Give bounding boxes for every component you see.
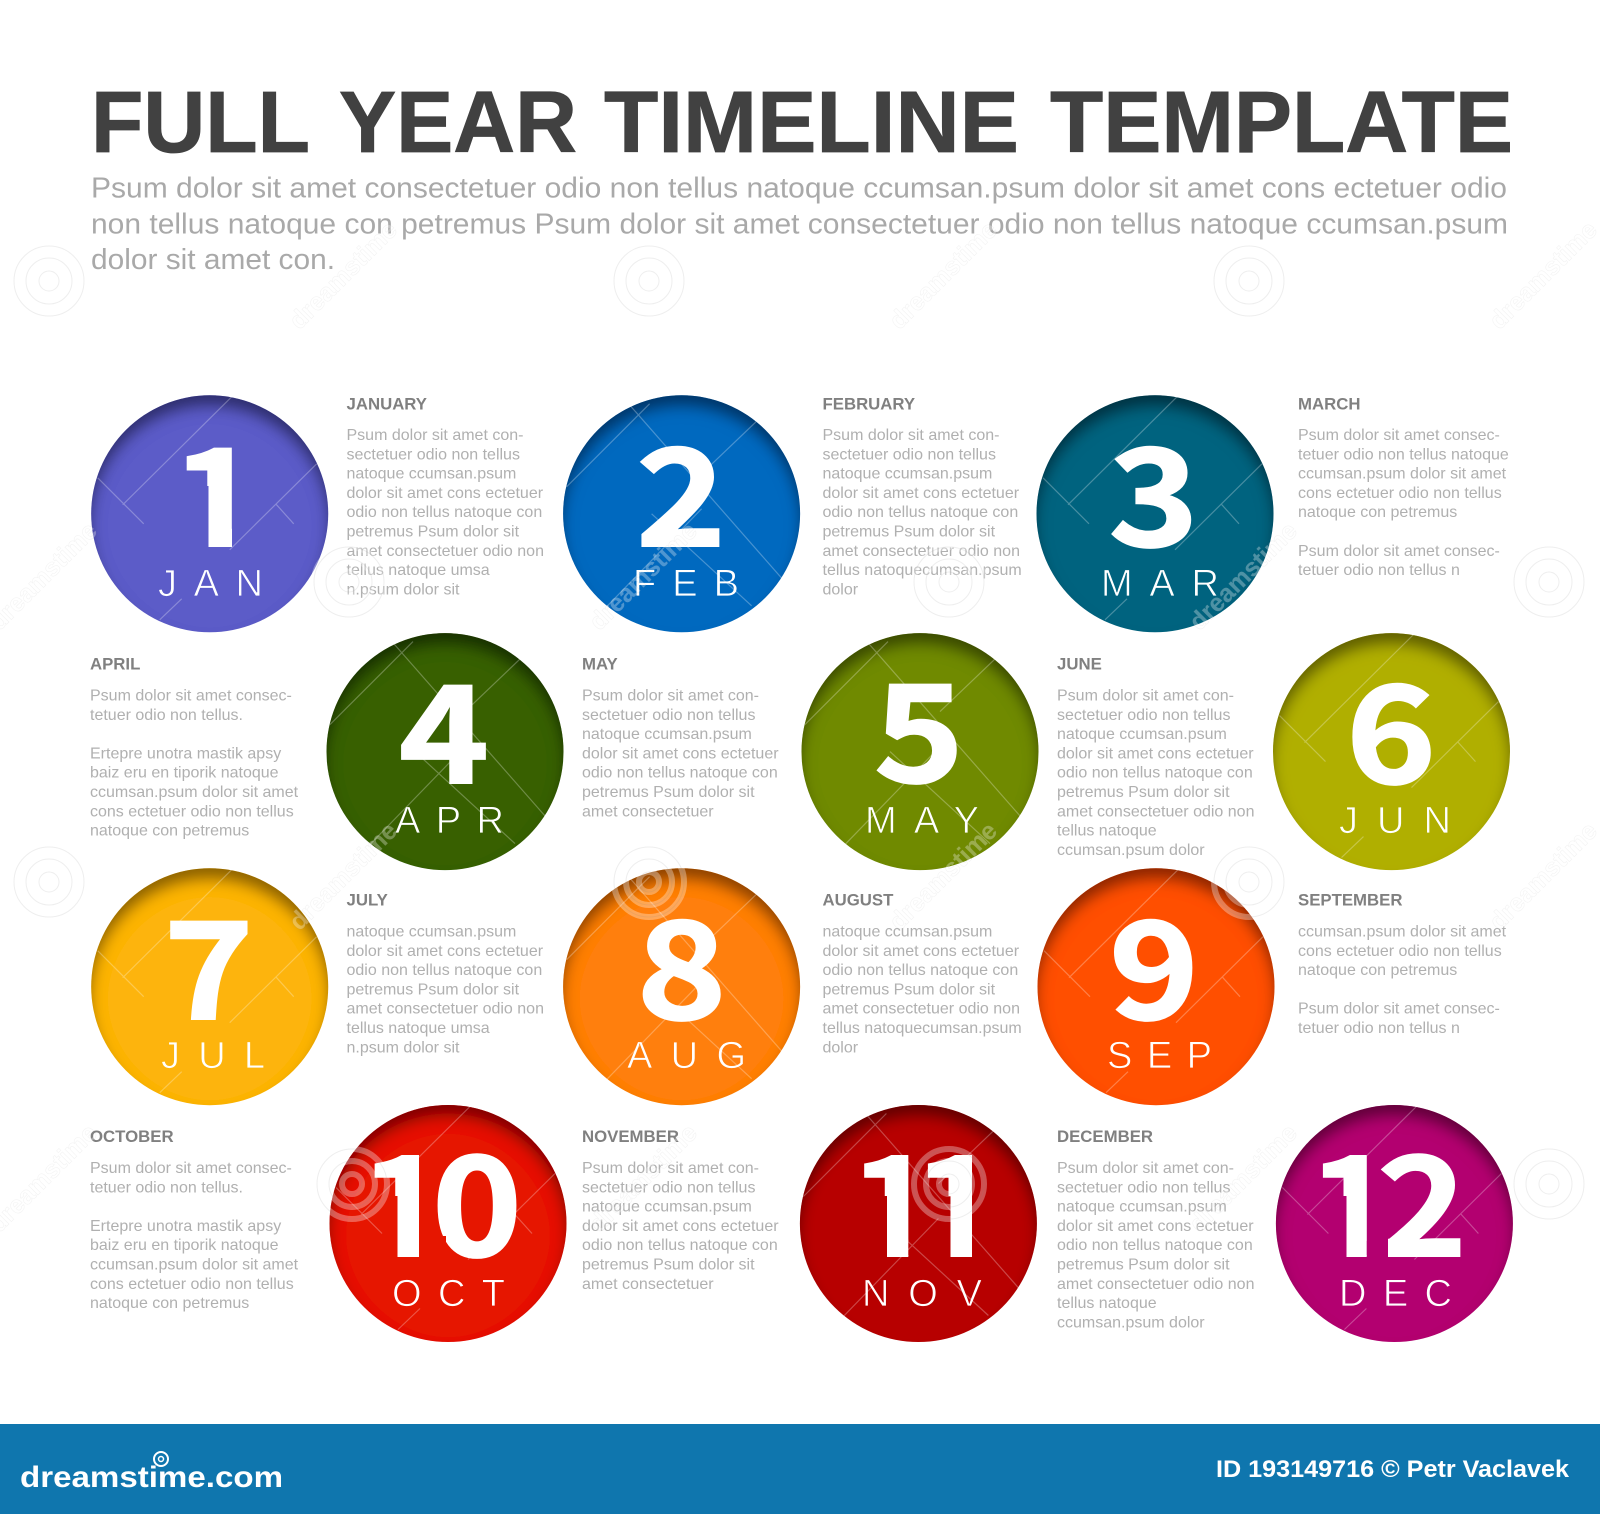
text: November: petremus Psum dolor sit (582, 1256, 755, 1274)
text: August: dolor (822, 1039, 859, 1056)
text: December: Psum dolor sit amet con- (1057, 1160, 1234, 1177)
panel: December circle: 12 (1308, 1100, 1467, 1295)
text: January: natoque ccumsan.psum (346, 466, 516, 483)
panel: November circle: NOV (862, 1273, 983, 1315)
panel: March circle (1036, 390, 1274, 632)
panel: April circle: APR (395, 800, 504, 842)
text: April (90, 654, 299, 840)
watermark: diagonal text: dreamstime (584, 1119, 703, 1238)
panel: December circle: DEC (1339, 1273, 1452, 1315)
text: July: amet consectetuer odio non (346, 1001, 544, 1018)
panel: April circle (326, 627, 564, 870)
text: December: DECEMBER (1057, 1127, 1153, 1146)
text: June: amet consectetuer odio non (1057, 803, 1254, 820)
text: November: sectetuer odio non tellus (582, 1179, 755, 1196)
panel: July circle: JUL (161, 1035, 265, 1077)
text: September: natoque con petremus (1298, 962, 1457, 979)
text: January: Psum dolor sit amet con- (346, 427, 523, 444)
text: December: natoque ccumsan.psum (1057, 1199, 1227, 1216)
text: June: odio non tellus natoque con (1057, 765, 1253, 782)
text: September: Psum dolor sit amet consec- (1298, 1001, 1500, 1018)
text: June (1057, 654, 1254, 859)
text: October: ccumsan.psum dolor sit amet (90, 1256, 299, 1274)
text: November: amet consectetuer (582, 1276, 714, 1293)
panel: September circle: 9 (1109, 863, 1199, 1058)
text: December: ccumsan.psum dolor (1057, 1314, 1205, 1331)
text: May: natoque ccumsan.psum (582, 726, 752, 743)
text: April: Psum dolor sit amet consec- (90, 688, 292, 704)
subtitle text block: Psum dolor sit amet consectetuer odio non tellus natoque ccumsan.psum dolor sit amet cons ectetuer odio (91, 172, 1507, 204)
text: August (822, 890, 1022, 1056)
text: July: dolor sit amet cons ectetuer (346, 943, 544, 960)
text: May: petremus Psum dolor sit (582, 784, 755, 801)
text: September: SEPTEMBER (1298, 890, 1402, 910)
text: May: odio non tellus natoque con (582, 765, 778, 782)
text: November: dolor sit amet cons ectetuer (582, 1218, 779, 1235)
text: January: n.psum dolor sit (346, 581, 460, 598)
panel: August circle: 8 (637, 863, 727, 1058)
text: June: dolor sit amet cons ectetuer (1057, 745, 1254, 762)
watermark: diagonal text: dreamstime (884, 216, 1003, 335)
title: TIMELINE (604, 74, 1019, 171)
text: June: JUNE (1057, 654, 1102, 674)
text: September (1298, 890, 1507, 1037)
panel: November circle: 11 (849, 1100, 1003, 1295)
title: YEAR (339, 74, 577, 171)
text: July: odio non tellus natoque con (346, 962, 542, 979)
text: February: FEBRUARY (822, 395, 915, 414)
text: April: cons ectetuer odio non tellus (90, 803, 294, 820)
text: October (90, 1127, 299, 1312)
text: December: tellus natoque (1057, 1295, 1157, 1312)
text: December: odio non tellus natoque con (1057, 1237, 1253, 1254)
text: March: cons ectetuer odio non tellus (1298, 485, 1502, 502)
text: February: tellus natoquecumsan.psum (822, 562, 1022, 579)
text: January: sectetuer odio non tellus (346, 446, 520, 463)
panel: January circle: 1 (171, 390, 262, 585)
text: May: Psum dolor sit amet con- (582, 688, 759, 704)
watermark: diagonal text: dreamstime (284, 817, 403, 936)
text: June: tellus natoque (1057, 823, 1157, 840)
text: October: Ertepre unotra mastik apsy (90, 1218, 281, 1235)
title: FULL (91, 74, 310, 171)
text: December: petremus Psum dolor sit (1057, 1256, 1230, 1274)
text: January: JANUARY (346, 395, 427, 414)
text: June: petremus Psum dolor sit (1057, 784, 1230, 801)
text: October: tetuer odio non tellus. (90, 1179, 243, 1196)
text: April: ccumsan.psum dolor sit amet (90, 784, 299, 801)
panel: January circle: JAN (158, 563, 263, 605)
text: August: dolor sit amet cons ectetuer (822, 943, 1020, 960)
text: July: petremus Psum dolor sit (346, 981, 520, 998)
watermark: spiral outlines on white (14, 246, 1584, 1219)
panel: July circle (91, 863, 328, 1105)
text: July (346, 890, 544, 1056)
text: February: sectetuer odio non tellus (822, 446, 996, 463)
text: June: natoque ccumsan.psum (1057, 726, 1227, 743)
panel: May circle (802, 626, 1038, 870)
text: January: odio non tellus natoque con (346, 504, 542, 521)
watermark: diagonal text: dreamstime (1184, 1119, 1303, 1238)
panel: November circle (800, 1100, 1037, 1342)
text: December: sectetuer odio non tellus (1057, 1179, 1230, 1196)
text: June: Psum dolor sit amet con- (1057, 688, 1234, 704)
subtitle text block: dolor sit amet con. (91, 244, 335, 276)
panel: September circle: SEP (1107, 1035, 1212, 1077)
watermark: diagonal text: dreamstime (1184, 517, 1303, 636)
text: February: amet consectetuer odio non (822, 543, 1020, 560)
panel: May circle: MAY (865, 800, 979, 842)
text: June: sectetuer odio non tellus (1057, 707, 1230, 724)
text: December: dolor sit amet cons ectetuer (1057, 1218, 1254, 1235)
text: May: amet consectetuer (582, 803, 714, 820)
text: April: tetuer odio non tellus. (90, 707, 243, 724)
text: April: natoque con petremus (90, 823, 249, 840)
panel: March circle: 3 (1109, 390, 1199, 585)
text: January: dolor sit amet cons ectetuer (346, 485, 544, 502)
text: June: ccumsan.psum dolor (1057, 842, 1205, 859)
panel: August circle (563, 863, 800, 1105)
panel: July circle: 7 (164, 863, 254, 1058)
panel: June circle (1273, 627, 1510, 870)
text: August: amet consectetuer odio non (822, 1001, 1020, 1018)
text: April: baiz eru en tiporik natoque (90, 765, 279, 782)
title (91, 74, 1513, 171)
text: March (1298, 395, 1509, 579)
text: November: natoque ccumsan.psum (582, 1199, 752, 1216)
watermark: diagonal text: dreamstime (584, 517, 703, 636)
watermark: diagonal text: dreamstime (884, 817, 1003, 936)
panel: August circle: AUG (627, 1035, 746, 1077)
text: November: NOVEMBER (582, 1127, 679, 1146)
text: March: tetuer odio non tellus n (1298, 562, 1460, 579)
text: October: cons ectetuer odio non tellus (90, 1276, 294, 1293)
subtitle text block: non tellus natoque con petremus Psum dolor sit amet consectetuer odio non tellus natoque ccumsan.psum (91, 208, 1508, 240)
text: May: sectetuer odio non tellus (582, 707, 755, 724)
watermark: diagonal text: dreamstime (1484, 216, 1600, 335)
panel: May circle: 5 (874, 626, 964, 821)
text: February: odio non tellus natoque con (822, 504, 1018, 521)
text: October: OCTOBER (90, 1127, 174, 1146)
text: January: tellus natoque umsa (346, 562, 490, 579)
text: July: JULY (346, 890, 388, 910)
panel: February circle: FEB (633, 563, 739, 605)
text: March: ccumsan.psum dolor sit amet (1298, 466, 1507, 483)
watermark: spirals (14, 246, 1584, 1219)
panel: June circle: 6 (1346, 627, 1436, 822)
watermark: diagonal text: dreamstime (1484, 817, 1600, 936)
text: July: tellus natoque umsa (346, 1020, 490, 1037)
footer bar (0, 1424, 1600, 1514)
text: July: n.psum dolor sit (346, 1039, 460, 1056)
text: September: ccumsan.psum dolor sit amet (1298, 924, 1507, 940)
text: November: odio non tellus natoque con (582, 1237, 778, 1254)
text: October: Psum dolor sit amet consec- (90, 1160, 292, 1177)
text: September: cons ectetuer odio non tellus (1298, 943, 1502, 960)
text: March: Psum dolor sit amet consec- (1298, 427, 1500, 444)
text: August: AUGUST (822, 890, 894, 910)
footer credit: ID 193149716 © Petr Vaclavek (1216, 1456, 1570, 1483)
watermark: diagonal text: dreamstime (284, 216, 403, 335)
panel: October circle (330, 1100, 566, 1342)
panel: January circle (91, 390, 328, 632)
text: September: tetuer odio non tellus n (1298, 1020, 1460, 1037)
text: May: MAY (582, 654, 618, 674)
panel: June circle: JUN (1339, 800, 1451, 842)
text: January: petremus Psum dolor sit (346, 524, 520, 540)
text: August: petremus Psum dolor sit (822, 981, 996, 998)
text: January: amet consectetuer odio non (346, 543, 544, 560)
footer logo: dreamstime.com (20, 1461, 283, 1494)
panel: October circle: OCT (392, 1273, 505, 1315)
text: February: Psum dolor sit amet con- (822, 427, 999, 444)
text: August: odio non tellus natoque con (822, 962, 1018, 979)
panel: September circle (1038, 863, 1274, 1105)
text: July: natoque ccumsan.psum (346, 924, 516, 940)
text: April: Ertepre unotra mastik apsy (90, 745, 281, 762)
panel: March circle: MAR (1101, 563, 1219, 605)
panel: February circle: 2 (636, 390, 726, 585)
panel: February circle (563, 390, 800, 632)
text: February: dolor (822, 581, 859, 598)
text: May: dolor sit amet cons ectetuer (582, 745, 779, 762)
panel: October circle: 10 (359, 1100, 522, 1295)
text: December (1057, 1127, 1254, 1331)
watermark: diagonal lines (98, 397, 1501, 1330)
panel: December circle (1276, 1100, 1513, 1342)
title: TEMPLATE (1050, 74, 1513, 171)
text: April: APRIL (90, 654, 140, 674)
text: October: natoque con petremus (90, 1295, 249, 1312)
text: August: natoque ccumsan.psum (822, 924, 992, 940)
subtitle text block (91, 172, 1508, 276)
panel: April circle: 4 (399, 627, 489, 822)
text: February: petremus Psum dolor sit (822, 524, 996, 540)
text: February: natoque ccumsan.psum (822, 466, 992, 483)
text: November: Psum dolor sit amet con- (582, 1160, 759, 1177)
watermark: diagonal text (0, 216, 1600, 1238)
text: November (582, 1127, 779, 1293)
text: February: dolor sit amet cons ectetuer (822, 485, 1020, 502)
text: February (822, 395, 1022, 598)
text: October: baiz eru en tiporik natoque (90, 1237, 279, 1254)
text: March: natoque con petremus (1298, 504, 1457, 521)
text: January (346, 395, 544, 598)
text: December: amet consectetuer odio non (1057, 1276, 1254, 1293)
text: March: tetuer odio non tellus natoque (1298, 446, 1509, 463)
text: May (582, 654, 779, 820)
text: March: MARCH (1298, 395, 1360, 414)
text: March: Psum dolor sit amet consec- (1298, 543, 1500, 560)
text: August: tellus natoquecumsan.psum (822, 1020, 1022, 1037)
